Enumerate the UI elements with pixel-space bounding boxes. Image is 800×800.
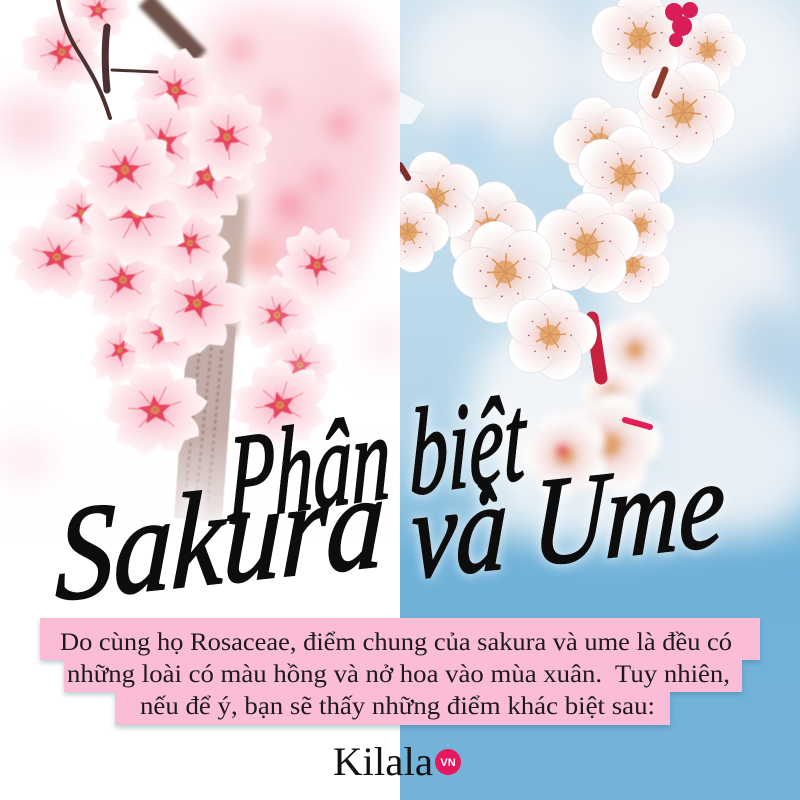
flowers: ume bbox=[350, 0, 761, 517]
intro callout bbox=[40, 618, 760, 725]
title word: Sakura: Sakura bbox=[54, 446, 387, 630]
intro text line 2: những loài có màu hồng và nở hoa vào mùa xuân. Tuy nhiên, bbox=[67, 661, 730, 688]
logo badge: VN bbox=[440, 757, 456, 769]
title words: và Ume: và Ume bbox=[409, 434, 727, 606]
panel: sakura photo background bbox=[0, 0, 401, 800]
intro text line 1: Do cùng họ Rosaceae, điểm chung của sakura và ume là đều có bbox=[60, 629, 732, 656]
bottom fade bbox=[0, 430, 400, 550]
title line: Phân biệt: Phân biệt bbox=[227, 368, 527, 547]
logo wordmark: Kilala bbox=[333, 739, 433, 784]
trunk bbox=[145, 0, 233, 520]
intro text line 3: nếu để ý, bạn sẽ thấy những điểm khác biệt sau: bbox=[140, 693, 655, 720]
panel: ume photo background bbox=[400, 0, 800, 800]
highlight bars bbox=[40, 618, 760, 725]
title: Phân biệt Sakura và Ume bbox=[54, 368, 727, 630]
stems bbox=[400, 70, 665, 427]
flowers: sakura bbox=[9, 0, 352, 454]
branches bbox=[58, 0, 157, 118]
logo: Kilala.VN bbox=[333, 739, 461, 784]
